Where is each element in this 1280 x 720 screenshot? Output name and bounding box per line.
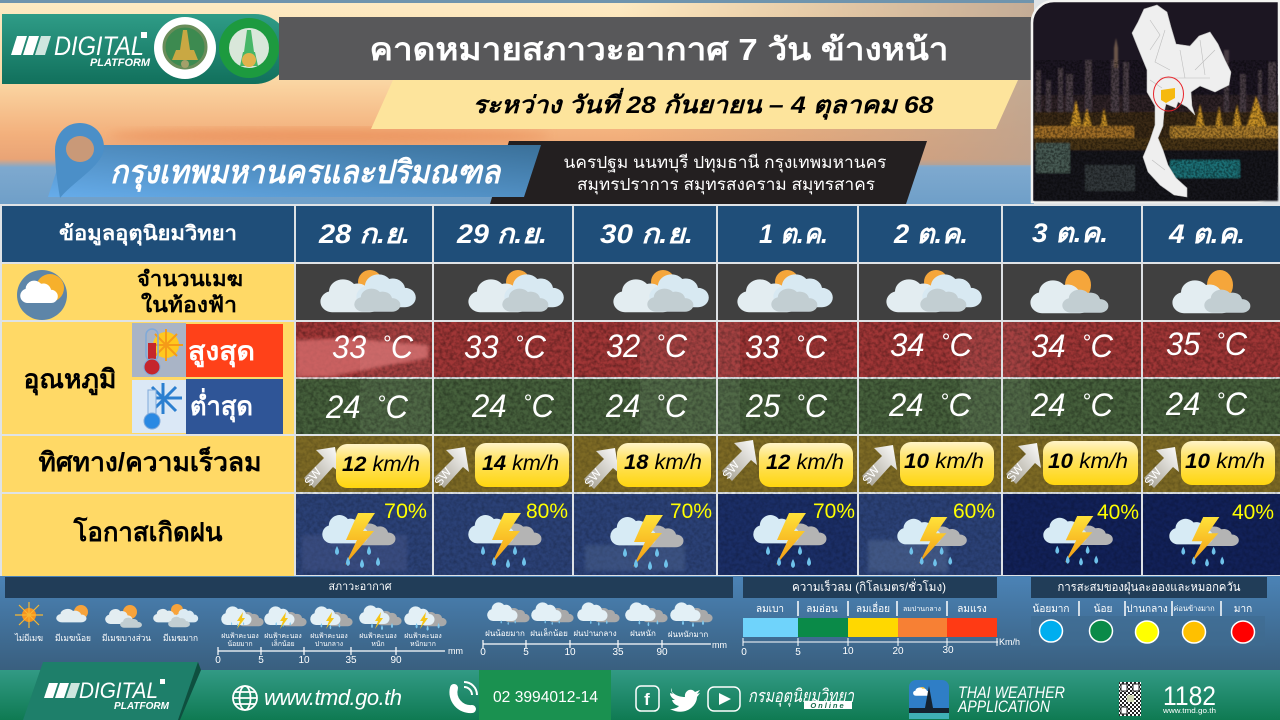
wind arrows: SW (1141, 464, 1165, 489)
min temperatures: ° (940, 389, 949, 414)
footer logo: PLATFORM (114, 701, 170, 712)
wind speed badges: 12 km/h (766, 451, 844, 474)
table header row: 29 ก.ย. (456, 219, 547, 249)
max temperatures: 34 (1031, 328, 1067, 364)
row label: wind (2, 436, 294, 492)
rain percentages: 40% (1097, 501, 1139, 524)
legend: weather conditions: ปานกลาง (315, 641, 343, 648)
min temperatures: ° (1216, 388, 1225, 413)
date range ribbon: ระหว่าง วันที่ 28 กันยายน – 4 ตุลาคม 68 (472, 87, 934, 120)
table header row (2, 206, 1280, 262)
max temperatures: ° (796, 331, 805, 356)
icon: sun behind cloud (17, 270, 67, 320)
max temperatures: ° (382, 331, 391, 356)
date range ribbon (371, 80, 1018, 129)
legend: weather conditions: น้อยมาก (227, 640, 253, 648)
min temperatures: ° (796, 390, 805, 415)
footer logo (23, 662, 201, 720)
qr code (1119, 682, 1141, 716)
thunderstorm rainfall scale: 10 (298, 655, 310, 666)
legend: weather conditions: หนักมาก (410, 640, 436, 648)
wind arrows: SW (1003, 460, 1027, 485)
legend: dust and haze: น้อยมาก (1033, 603, 1069, 615)
row: cloud amount: จำนวนเมฆ (137, 268, 243, 291)
rain scale: 35 (612, 647, 624, 658)
website: www.tmd.go.th (264, 685, 402, 710)
legend: weather conditions: ฝนหนักมาก (668, 630, 708, 639)
wind colour bar (743, 618, 997, 637)
max temperatures: 35 (1166, 326, 1202, 362)
min temperatures: 25 (746, 388, 782, 424)
max temperatures: ° (515, 331, 524, 356)
map of Thailand (1132, 5, 1231, 197)
max temperatures (332, 326, 1248, 365)
table header row: 2 ต.ค. (893, 219, 968, 249)
legend: weather conditions: หนัก (371, 640, 385, 648)
min temperatures: ° (656, 390, 665, 415)
row label: rain chance (2, 494, 294, 576)
rain percentages: 70% (384, 500, 427, 523)
rain icons (487, 602, 713, 627)
app name (957, 684, 1065, 716)
min temperatures: C (805, 388, 828, 424)
min temperatures: 24 (889, 387, 925, 423)
legend: wind speed: 30 (942, 645, 954, 656)
wind arrows: SW (431, 464, 455, 489)
legend: wind speed: 20 (892, 646, 904, 657)
legend: wind speed: ลมปานกลาง (903, 606, 941, 613)
table background colours (296, 322, 1280, 575)
title bar (279, 17, 1031, 80)
table header row: 28 ก.ย. (318, 219, 410, 249)
wind speed badges (336, 441, 1275, 488)
legend: weather conditions: มีเมฆน้อย (55, 633, 91, 643)
sky icons (15, 602, 198, 628)
min temperatures: C (949, 387, 972, 423)
rain scale: mm (712, 640, 727, 650)
hotline 1182: www.tmd.go.th (1162, 706, 1216, 715)
department online: Online (810, 701, 846, 710)
table header row: 3 ต.ค. (1032, 218, 1108, 248)
max temperatures: C (1225, 326, 1248, 362)
legend: weather conditions: สภาวะอากาศ (328, 581, 392, 593)
max temperatures: ° (656, 330, 665, 355)
rain scale: 5 (523, 647, 529, 658)
social icons: f (644, 690, 650, 709)
legend: weather conditions: เล็กน้อย (271, 639, 295, 648)
legend: weather conditions: ฝนฟ้าคะนอง (221, 632, 259, 640)
rain percentages (384, 500, 1274, 524)
max temperatures: C (1091, 328, 1114, 364)
thunderstorm icons (221, 605, 447, 631)
legend: wind speed: ลมเอื่อย (856, 601, 890, 615)
row label: wind: ทิศทาง/ความเร็วลม (38, 446, 262, 477)
legend: weather conditions: ฝนเล็กน้อย (530, 628, 568, 638)
max temperatures: 33 (745, 329, 781, 365)
min temperatures: ° (523, 390, 532, 415)
logo: digital platform: PLATFORM (90, 57, 151, 69)
thunderstorm rainfall scale: 5 (258, 655, 264, 666)
legend: weather conditions: มีเมฆบางส่วน (102, 633, 151, 643)
phone number: 02 3994012-14 (493, 689, 598, 706)
rain percentages: 70% (670, 500, 712, 523)
legend: dust and haze: ค่อนข้างมาก (1173, 604, 1215, 613)
rain percentages: 70% (813, 500, 855, 523)
legend: wind speed: Km/h (999, 637, 1020, 647)
thunderstorm rainfall scale (215, 646, 463, 666)
seal: ministry emblem (154, 17, 216, 79)
legend: dust and haze: น้อย (1094, 603, 1112, 615)
region banner: กรุงเทพมหานครและปริมณฑล (110, 154, 502, 192)
wind speed badges: 18 km/h (624, 451, 702, 474)
min temperatures: C (1225, 386, 1248, 422)
rain scale: 90 (656, 647, 668, 658)
department online (748, 686, 855, 710)
cloud icons by day (320, 270, 1250, 313)
max temperatures: C (524, 329, 547, 365)
max temperatures: 32 (606, 328, 642, 364)
title bar: คาดหมายสภาวะอากาศ 7 วัน ข้างหน้า (370, 32, 948, 67)
footer logo: DIGITAL (79, 678, 158, 703)
min label (132, 379, 283, 434)
legend: weather conditions (5, 577, 733, 666)
max temperatures: C (950, 327, 973, 363)
wind speed badges: 14 km/h (482, 452, 559, 475)
legend: weather conditions: ฝนฟ้าคะนอง (359, 632, 397, 640)
rain icons by day (322, 513, 1239, 570)
icon: phone (453, 682, 477, 709)
rain scale (480, 640, 727, 658)
legend: weather conditions: ไม่มีเมฆ (14, 633, 43, 643)
legend: weather conditions: ฝนฟ้าคะนอง (404, 632, 442, 640)
header: sunset sky background (0, 0, 1034, 204)
legend: dust and haze: การสะสมของฝุ่นละอองและหมอกควัน (1058, 580, 1240, 595)
min temperatures: 24 (1031, 387, 1067, 423)
row label: rain chance: โอกาสเกิดฝน (73, 516, 223, 547)
legend: wind speed: ลมแรง (957, 604, 987, 615)
min temperatures: C (665, 388, 688, 424)
min temperatures: 24 (472, 388, 508, 424)
rain scale: 0 (480, 647, 486, 658)
logo: digital platform: DIGITAL (54, 31, 144, 61)
min temperatures: ° (377, 391, 386, 416)
city skyline (1034, 38, 1278, 201)
legend: dust and haze: ปานกลาง (1126, 604, 1168, 615)
seal: meteorological department (219, 18, 279, 78)
thunderstorm rainfall scale: mm (448, 646, 463, 656)
icon: globe (233, 686, 257, 710)
max temperatures: C (665, 328, 688, 364)
max label (132, 323, 283, 377)
grid lines (294, 206, 1143, 576)
app icon (909, 680, 949, 719)
wind speed badges: 10 km/h (904, 450, 984, 473)
provinces panel: สมุทรปราการ สมุทรสงคราม สมุทรสาคร (577, 175, 875, 195)
wind arrows: SW (719, 457, 743, 482)
phone number (479, 670, 611, 720)
row: cloud amount (2, 264, 1280, 320)
max temperatures: ° (1082, 330, 1091, 355)
wind speed badges: 10 km/h (1185, 450, 1265, 473)
wind arrows: SW (859, 462, 883, 487)
table header row: 1 ต.ค. (759, 219, 828, 249)
footer (0, 662, 1280, 720)
legend: weather conditions: ฝนน้อยมาก (485, 629, 525, 638)
icon: location pin (55, 123, 104, 198)
min temperatures: 24 (1166, 386, 1202, 422)
logo band (2, 14, 290, 84)
wind speed badges: 12 km/h (342, 453, 420, 476)
min temperatures: 24 (326, 389, 362, 425)
legend: dust and haze (1031, 577, 1267, 646)
row label: temperature: อุณหภูมิ (24, 364, 116, 396)
min temperatures: C (1091, 387, 1114, 423)
wind speed badges: 10 km/h (1048, 450, 1128, 473)
thunderstorm rainfall scale: 90 (390, 655, 402, 666)
wind arrows: SW (581, 465, 605, 490)
wind arrows (301, 440, 1179, 490)
max temperatures: ° (941, 329, 950, 354)
max temperatures: C (805, 329, 828, 365)
legend: weather conditions: ฝนปานกลาง (573, 629, 617, 638)
legend: wind speed: 0 (741, 647, 747, 658)
provinces panel (490, 141, 927, 204)
region banner (48, 145, 541, 197)
logo: digital platform (11, 31, 151, 69)
legend: wind speed: ลมอ่อน (806, 604, 838, 615)
table header row: 30 ก.ย. (600, 219, 693, 249)
legend: wind speed: 10 (842, 646, 854, 657)
social icons (636, 686, 740, 712)
min label: ต่ำสุด (190, 387, 253, 423)
legend: weather conditions: ฝนหนัก (630, 629, 656, 638)
min temperatures: ° (1082, 389, 1091, 414)
thunderstorm rainfall scale: 0 (215, 655, 221, 666)
legend: wind speed: ลมเบา (756, 604, 784, 615)
rain percentages: 60% (953, 500, 995, 523)
max temperatures: C (391, 329, 414, 365)
legend: weather conditions: มีเมฆมาก (163, 633, 198, 643)
legend: wind speed: 5 (795, 647, 801, 658)
rain scale: 10 (564, 647, 576, 658)
row: cloud amount: ในท้องฟ้า (141, 292, 237, 317)
min temperatures: C (532, 388, 555, 424)
app name: APPLICATION (957, 698, 1050, 716)
max temperatures: ° (1216, 328, 1225, 353)
thunderstorm rainfall scale: 35 (345, 655, 357, 666)
table header row: ข้อมูลอุตุนิยมวิทยา (59, 222, 237, 247)
provinces panel: นครปฐม นนทบุรี ปทุมธานี กรุงเทพมหานคร (564, 153, 886, 173)
legend: wind speed: ความเร็วลม (กิโลเมตร/ชั่วโมง) (792, 578, 946, 594)
legend: dust and haze: มาก (1234, 604, 1252, 615)
dust level dots (1040, 620, 1254, 643)
max label: สูงสุด (188, 336, 255, 368)
max temperatures: 33 (332, 329, 368, 365)
min temperatures (325, 386, 1248, 425)
min temperatures: 24 (606, 388, 642, 424)
row label: temperature (2, 322, 294, 434)
legend: wind speed (741, 577, 1020, 658)
legend background (0, 576, 1280, 670)
wind arrows: SW (301, 464, 325, 489)
rain percentages: 80% (526, 500, 568, 523)
photo panel with Thailand map (1032, 1, 1279, 202)
min temperatures: C (386, 389, 409, 425)
max temperatures: 33 (464, 329, 500, 365)
legend: weather conditions: ฝนฟ้าคะนอง (264, 632, 302, 640)
table header row: 4 ต.ค. (1168, 219, 1245, 249)
max temperatures: 34 (890, 327, 926, 363)
department online: กรมอุตุนิยมวิทยา (748, 686, 855, 707)
rain percentages: 40% (1232, 501, 1274, 524)
hotline 1182: 1182 (1163, 681, 1216, 711)
legend: weather conditions: ฝนฟ้าคะนอง (310, 632, 348, 640)
app name: THAI WEATHER (958, 684, 1065, 702)
